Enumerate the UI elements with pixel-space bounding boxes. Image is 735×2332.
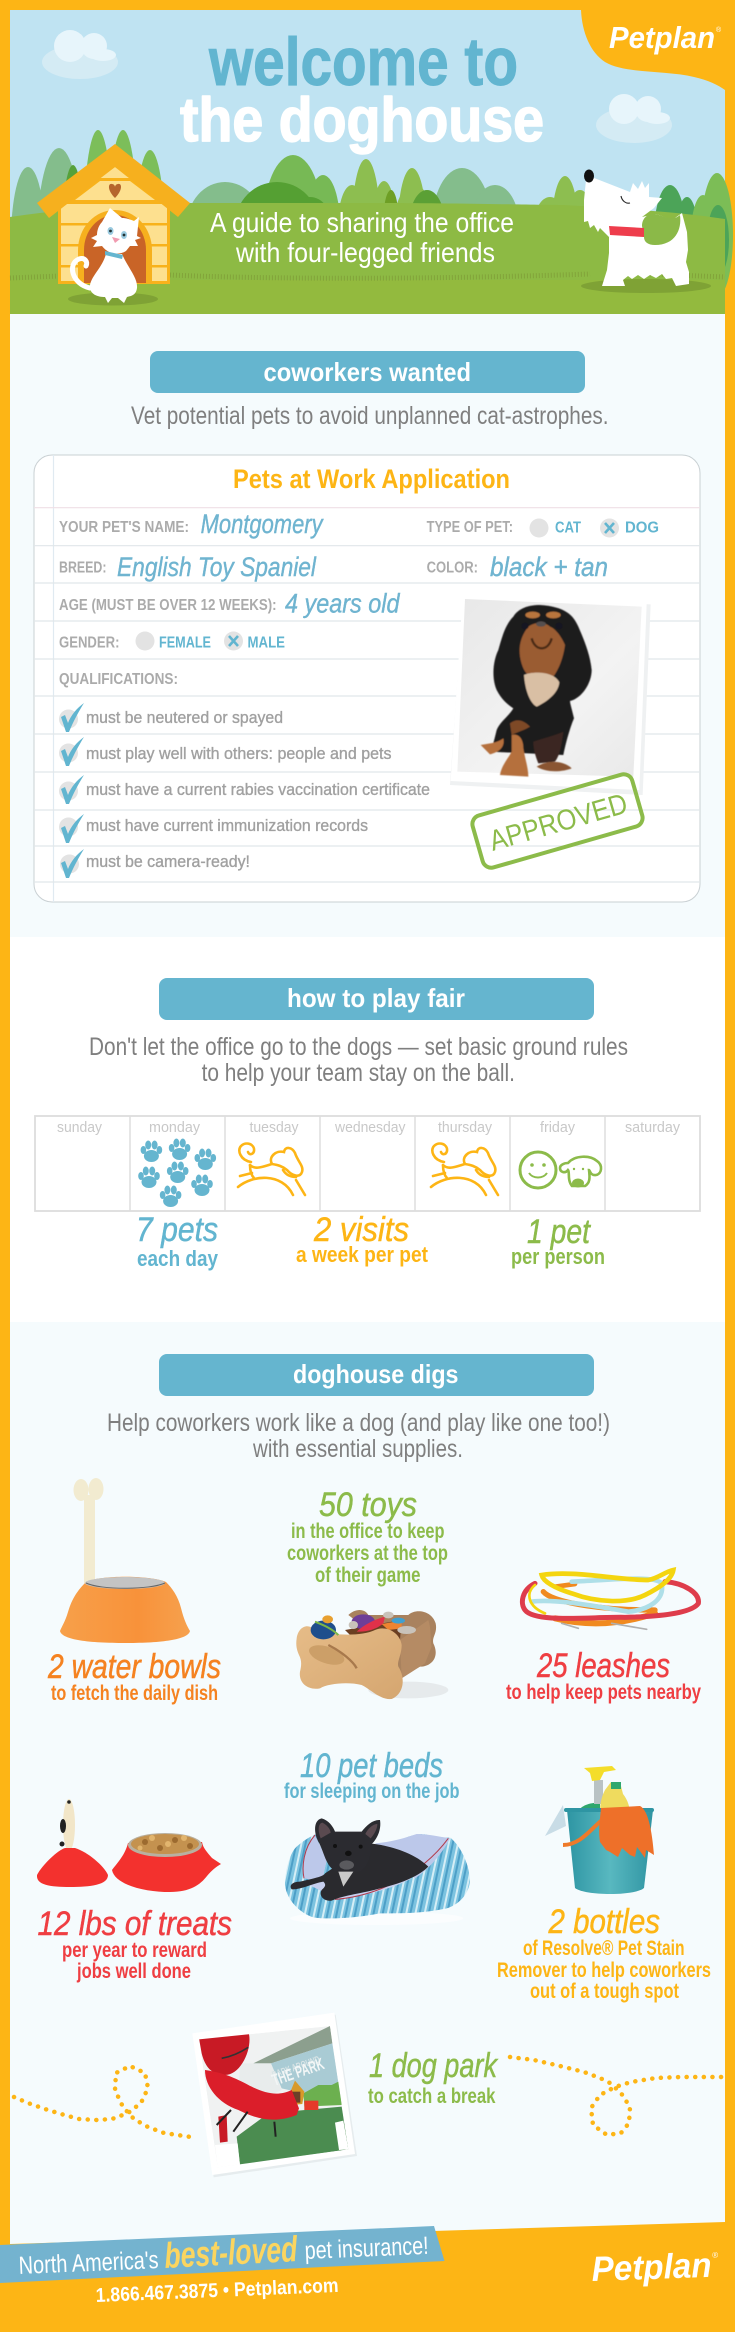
- text: 2 bottles: out of a tough spot: [530, 1980, 679, 2003]
- icon: person and pet faces: [520, 1152, 601, 1188]
- icon: doghouse: [37, 144, 190, 284]
- dotted trail right: [510, 2057, 724, 2135]
- logo: Petplan: [609, 20, 715, 55]
- photo: bone-shaped toy box: [296, 1610, 448, 1699]
- intro text: Vet potential pets to avoid unplanned cat-astrophes.: [131, 402, 608, 430]
- heading: [150, 351, 585, 393]
- intro text: with essential supplies.: [252, 1435, 463, 1463]
- field labels: TYPE OF PET:: [427, 519, 513, 536]
- qualification text: must be camera-ready!: [86, 852, 250, 871]
- text: 50 toys: 50 toys: [319, 1486, 417, 1524]
- trees: [11, 130, 733, 350]
- qualification text: must have current immunization records: [86, 816, 368, 835]
- footer logo: ®: [712, 2251, 718, 2260]
- text: 50 toys: [287, 1486, 448, 1587]
- stat: 1 pet: [511, 1213, 605, 1269]
- tagline: [210, 207, 514, 268]
- photo: leashes: [522, 1570, 698, 1629]
- field labels: [59, 519, 513, 688]
- stat: 1 pet: per person: [511, 1244, 605, 1269]
- chart: week calendar: tuesday: [250, 1119, 299, 1136]
- icon: cat: [68, 208, 158, 306]
- icon: running dog thursday: [431, 1144, 498, 1195]
- field labels: YOUR PET'S NAME:: [59, 519, 189, 536]
- radio options: FEMALE: [159, 635, 211, 652]
- banner: pet insurance!: [304, 2232, 429, 2265]
- field labels: QUALIFICATIONS:: [59, 671, 178, 688]
- chart: week calendar: wednesday: [334, 1119, 406, 1136]
- text: 10 pet beds: for sleeping on the job: [284, 1780, 460, 1803]
- qualification text: must have a current rabies vaccination certificate: [86, 780, 430, 799]
- chart: week calendar: sunday: [57, 1119, 102, 1136]
- text: 2 water bowls: 2 water bowls: [47, 1648, 221, 1686]
- text: 2 water bowls: [47, 1648, 221, 1705]
- radio options: MALE: [248, 635, 285, 652]
- text: 12 lbs of treats: [38, 1905, 232, 1983]
- heading: doghouse digs: [293, 1359, 458, 1389]
- corner tab: [581, 10, 725, 90]
- tagline: with four-legged friends: [235, 237, 495, 268]
- photo: Montgomery the spaniel: [450, 596, 651, 795]
- heading: coworkers wanted: [264, 357, 471, 387]
- panel: coworkers wanted: [10, 314, 725, 937]
- radio options: CAT: [555, 520, 581, 536]
- chart: week calendar: friday: [540, 1119, 575, 1136]
- qualification checks: [59, 703, 84, 878]
- heading: how to play fair: [287, 983, 465, 1013]
- photo: dog park: [192, 2013, 357, 2177]
- text: 1 dog park: [368, 2047, 499, 2108]
- intro text: Help coworkers work like a dog (and play like one too!): [107, 1409, 610, 1437]
- field labels: GENDER:: [59, 635, 120, 652]
- title line 2: the doghouse: [180, 86, 544, 155]
- panel: hero scene: [10, 10, 733, 350]
- text: 12 lbs of treats: 12 lbs of treats: [38, 1905, 232, 1943]
- text: 1 dog park: to catch a break: [368, 2085, 496, 2108]
- radio options: DOG: [625, 520, 659, 536]
- text: 50 toys: of their game: [315, 1564, 420, 1587]
- cloud right: [596, 94, 672, 143]
- text: 2 bottles: 2 bottles: [548, 1903, 660, 1941]
- handwritten answers: Montgomery: [201, 509, 324, 539]
- handwritten answers: English Toy Spaniel: [117, 552, 317, 582]
- stat: 7 pets: [136, 1211, 219, 1271]
- tagline: A guide to sharing the office: [210, 207, 514, 238]
- field labels: COLOR:: [427, 560, 478, 577]
- icon: scottie dog: [581, 170, 711, 293]
- panel: how to play fair: [10, 937, 725, 1322]
- text: 50 toys: in the office to keep: [291, 1520, 444, 1543]
- heading: [159, 1354, 594, 1396]
- photo: orange water bowl: [60, 1478, 190, 1643]
- panel: doghouse digs: [10, 1322, 725, 2252]
- handwritten answers: [117, 509, 608, 618]
- chart: week calendar: thursday: [438, 1119, 492, 1136]
- banner: North America's: [18, 2246, 159, 2280]
- qualification text: must be neutered or spayed: [86, 708, 283, 727]
- stat: 2 visits: a week per pet: [296, 1242, 429, 1267]
- logo: ®: [716, 26, 722, 34]
- cloud left: [42, 30, 118, 79]
- grass strip: [10, 274, 725, 278]
- text: 10 pet beds: [284, 1747, 460, 1803]
- qualification text: must play well with others: people and pets: [86, 744, 392, 763]
- heading: [159, 978, 594, 1020]
- intro text: [89, 1033, 628, 1087]
- dotted trail left: [14, 2066, 191, 2137]
- intro text: Don't let the office go to the dogs — set basic ground rules: [89, 1033, 628, 1061]
- stat: 7 pets: 7 pets: [136, 1211, 218, 1249]
- qualification text: [86, 708, 430, 871]
- ground: [10, 203, 725, 314]
- text: 1 dog park: 1 dog park: [369, 2047, 499, 2085]
- stat: 2 visits: 2 visits: [313, 1211, 409, 1249]
- text: 12 lbs of treats: jobs well done: [76, 1960, 191, 1983]
- stat: 7 pets: each day: [137, 1246, 219, 1271]
- stat: 1 pet: 1 pet: [527, 1213, 591, 1251]
- handwritten answers: 4 years old: [285, 588, 400, 618]
- contact line: 1.866.467.3875 • Petplan.com: [95, 2275, 339, 2307]
- form title: Pets at Work Application: [233, 464, 510, 494]
- radio options: [136, 518, 659, 652]
- intro text: [107, 1409, 610, 1463]
- approved stamp: APPROVED: [486, 788, 631, 858]
- text: 2 bottles: of Resolve® Pet Stain: [523, 1937, 684, 1960]
- photo: cleaning bucket: [545, 1766, 654, 1894]
- icon: running dog tuesday: [238, 1144, 305, 1195]
- text: 25 leashes: 25 leashes: [536, 1647, 670, 1685]
- field labels: BREED:: [59, 560, 106, 577]
- footer logo: Petplan: [591, 2246, 712, 2289]
- text: 12 lbs of treats: per year to reward: [62, 1939, 207, 1962]
- chart: week calendar: [35, 1116, 700, 1211]
- approved stamp: [470, 772, 645, 870]
- banner: best-loved: [163, 2228, 299, 2276]
- chart: week calendar: monday: [149, 1119, 200, 1136]
- text: 25 leashes: [506, 1647, 701, 1704]
- photo: red treat bowls: [37, 1799, 221, 1892]
- text: 2 bottles: [497, 1903, 711, 2003]
- panel: footer: [0, 2222, 735, 2332]
- stat: 2 visits: [296, 1211, 429, 1267]
- photo: dog in bed: [285, 1818, 470, 1925]
- field labels: AGE (MUST BE OVER 12 WEEKS):: [59, 597, 277, 614]
- text: 50 toys: coworkers at the top: [287, 1542, 448, 1565]
- intro text: to help your team stay on the ball.: [202, 1059, 515, 1087]
- icon: seven paws: [138, 1138, 216, 1207]
- text: 2 water bowls: to fetch the daily dish: [51, 1682, 218, 1705]
- photo: dog park: BARK AROUND: [271, 2054, 322, 2081]
- title line 1: welcome to: [208, 24, 518, 100]
- handwritten answers: black + tan: [490, 552, 608, 582]
- text: 10 pet beds: 10 pet beds: [300, 1747, 443, 1785]
- banner: [0, 2226, 444, 2283]
- chart: week calendar: saturday: [625, 1119, 680, 1136]
- panel: application form: [34, 455, 700, 902]
- photo: dog park: THE PARK: [269, 2054, 327, 2090]
